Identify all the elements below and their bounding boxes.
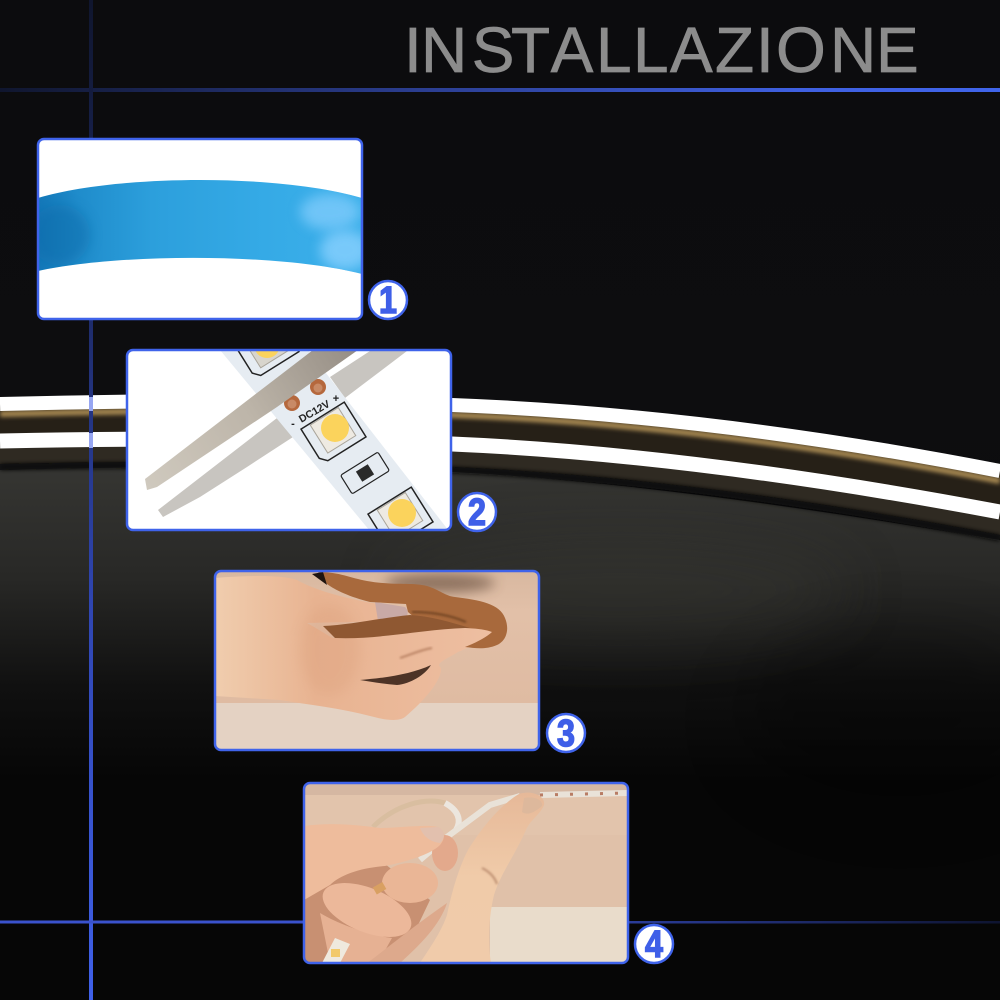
led strip	[221, 351, 447, 529]
led strip: DC12V	[297, 398, 332, 426]
scissors upper blade	[145, 350, 358, 490]
badge 3: 3	[557, 713, 575, 755]
badge 3	[547, 713, 585, 755]
panel: step 3 clean the surface	[215, 571, 539, 750]
vertical line	[89, 0, 93, 1000]
strip loop and led strip	[373, 793, 627, 860]
hands	[304, 793, 544, 963]
badge 4: 4	[645, 924, 663, 966]
hand	[215, 576, 494, 720]
neon strip backdrop	[0, 401, 1000, 1000]
scissors lower blade	[158, 351, 407, 517]
lower horizontal line	[0, 920, 1000, 924]
blue tape	[39, 180, 361, 274]
badge 2: 2	[468, 492, 486, 534]
panel: step 4 apply the strip	[304, 783, 628, 963]
led strip: -	[291, 418, 295, 430]
led strip: +	[333, 393, 339, 405]
panel: step 2 cut the strip	[126, 348, 452, 532]
badge 4	[635, 924, 673, 966]
top horizontal line	[0, 88, 1000, 92]
badge 2	[458, 492, 496, 534]
cloth	[312, 572, 507, 648]
badge 1	[369, 280, 407, 322]
badge 1: 1	[379, 280, 397, 322]
title: INSTALLAZIONE	[404, 14, 919, 86]
panel: step 1 protective film	[30, 139, 370, 319]
